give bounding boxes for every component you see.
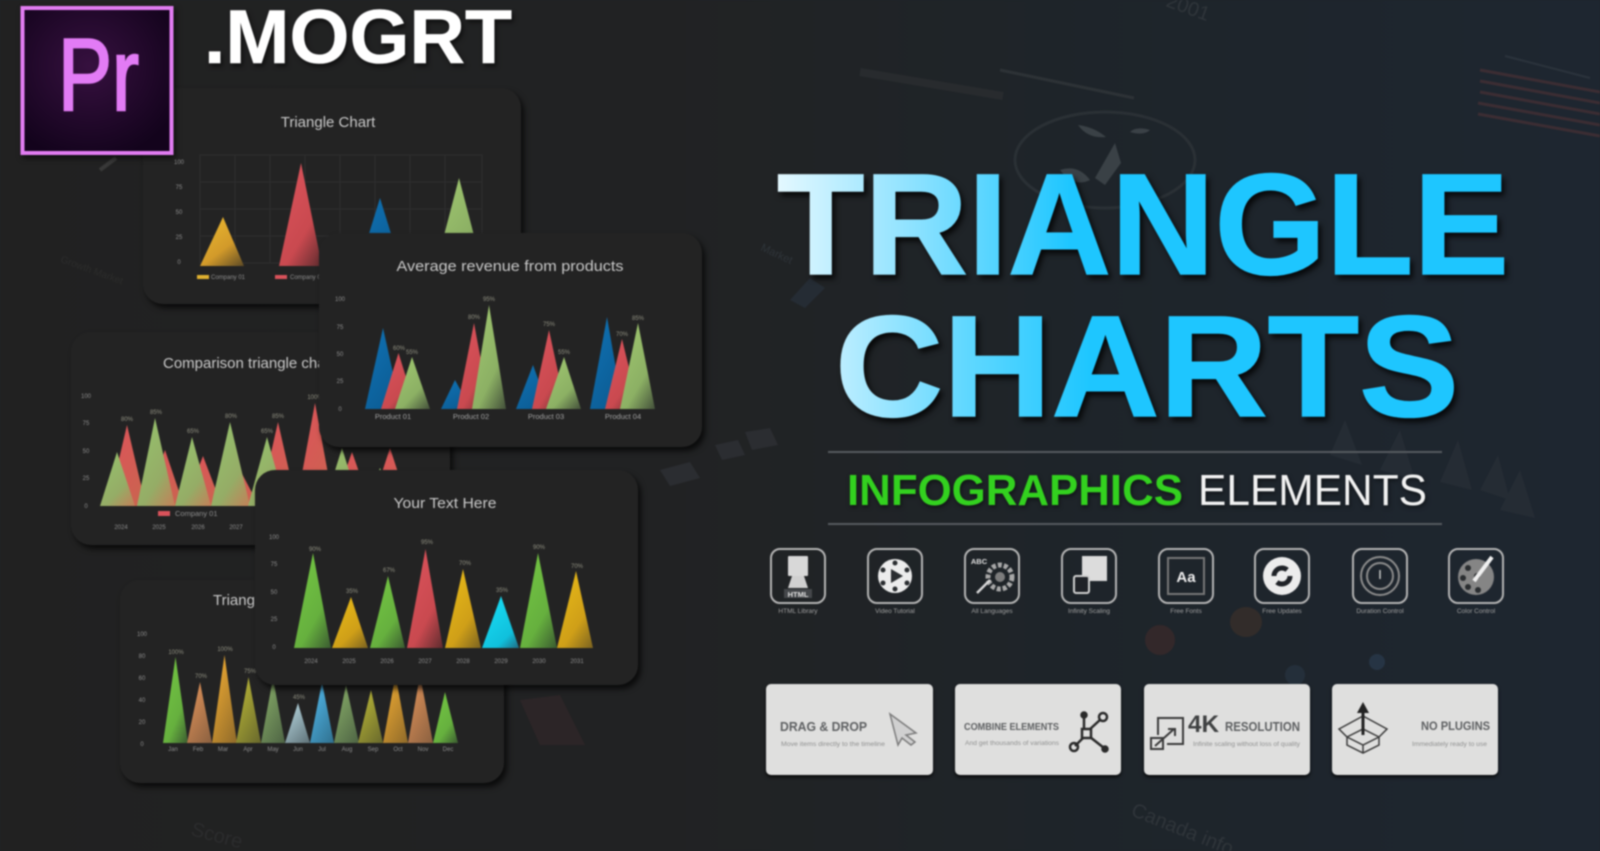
y axis labels: 50 — [337, 352, 344, 358]
value labels: 70% — [616, 332, 629, 338]
value labels: 67% — [383, 568, 396, 574]
product labels: Product 03 — [528, 412, 564, 421]
y axis labels: 25 — [337, 379, 344, 385]
feature: combine elements: COMBINE ELEMENTS — [964, 722, 1059, 733]
chart grid — [200, 155, 482, 263]
feature: combine elements — [955, 684, 1121, 775]
value labels: 80% — [121, 417, 134, 423]
card title: Average revenue from products — [396, 258, 624, 275]
value labels: 70% — [459, 561, 472, 567]
value labels — [168, 647, 306, 701]
card title: Your Text Here — [394, 495, 496, 512]
value labels: 100% — [217, 647, 233, 653]
icon: connected nodes — [1070, 712, 1108, 752]
feature: drag and drop: Move items directly to the timeline — [781, 742, 886, 748]
value labels — [309, 540, 584, 595]
x axis labels: 2024 — [114, 525, 128, 531]
month labels: Mar — [218, 747, 228, 753]
value labels: 75% — [543, 322, 556, 328]
value labels: 55% — [558, 350, 571, 356]
feature: combine elements: And get thousands of variations — [965, 741, 1059, 747]
y axis labels — [137, 632, 148, 748]
month labels: May — [267, 747, 279, 753]
title: TRIANGLE: TRIANGLE — [777, 144, 1509, 305]
icon: HTML library — [771, 549, 825, 615]
y axis labels: 60 — [139, 676, 146, 682]
card title: Triangle Chart — [281, 114, 376, 131]
y axis labels — [269, 535, 280, 651]
y axis labels: 25 — [83, 476, 90, 482]
icon: infinity scaling: Infinity Scaling — [1068, 608, 1110, 615]
month labels: Aug — [342, 747, 352, 753]
value labels: 70% — [195, 674, 208, 680]
value labels: 80% — [225, 414, 238, 420]
feature: drag and drop — [766, 684, 933, 775]
faint background charts: Growth Market — [59, 254, 125, 287]
y axis labels: 100 — [137, 632, 148, 638]
value labels: 70% — [571, 564, 584, 570]
y axis labels: 0 — [140, 742, 144, 748]
triangles — [294, 549, 593, 648]
icon: HTML library: HTML Library — [778, 608, 818, 615]
icon: all languages — [965, 549, 1019, 615]
month labels: Jul — [318, 747, 326, 753]
month labels: Sep — [368, 747, 379, 753]
value labels: 85% — [632, 316, 645, 322]
icon: video tutorial — [868, 549, 922, 615]
x axis labels: 2025 — [342, 659, 356, 665]
y axis labels — [174, 160, 185, 266]
subtitle: infographics elements: ELEMENTS — [1198, 466, 1427, 515]
icon: resize arrow — [1151, 718, 1183, 749]
icon: duration control: Duration Control — [1356, 608, 1404, 615]
value labels: 65% — [261, 429, 274, 435]
icon: cursor — [890, 714, 916, 745]
y axis labels — [335, 297, 346, 413]
value labels: 35% — [496, 588, 509, 594]
month labels: Jun — [293, 747, 303, 753]
month labels: Apr — [243, 747, 253, 753]
legend: Company 02 — [290, 275, 325, 281]
y axis labels: 75 — [337, 325, 344, 331]
icon: color control: Color Control — [1457, 608, 1496, 615]
value labels: 45% — [293, 695, 306, 701]
feature: 4K resolution — [1144, 684, 1310, 775]
icon: HTML library: HTML — [788, 590, 809, 599]
y axis labels: 100 — [269, 535, 280, 541]
x axis labels: 2031 — [570, 659, 584, 665]
month labels: Dec — [443, 747, 453, 753]
y axis labels: 40 — [139, 698, 146, 704]
icon: infinity scaling — [1062, 549, 1116, 615]
month labels: Jan — [168, 747, 178, 753]
monthly triangles — [163, 655, 458, 743]
y axis labels: 80 — [139, 654, 146, 660]
y axis labels: 75 — [271, 562, 278, 568]
legend — [197, 275, 325, 281]
icon: Premiere Pro logo — [22, 8, 172, 153]
y axis labels: 25 — [271, 617, 278, 623]
feature: drag and drop: DRAG & DROP — [780, 719, 867, 734]
y axis labels: 100 — [335, 297, 346, 303]
month labels: Oct — [393, 747, 403, 753]
icon: all languages: All Languages — [971, 608, 1013, 615]
y axis labels: 50 — [271, 590, 278, 596]
red triangles — [108, 403, 409, 506]
month labels — [168, 747, 453, 753]
x axis labels: 2025 — [152, 525, 166, 531]
triangles — [200, 163, 482, 266]
icon: video tutorial: Video Tutorial — [875, 608, 915, 615]
icon: free fonts: Free Fonts — [1170, 608, 1202, 615]
value labels: 85% — [272, 414, 285, 420]
x axis labels: 2026 — [191, 525, 205, 531]
y axis labels: 0 — [177, 260, 181, 266]
product labels: Product 04 — [605, 412, 641, 421]
value labels: 80% — [468, 315, 481, 321]
value labels: 90% — [533, 545, 546, 551]
panel: Triangle chart by months card — [120, 580, 504, 783]
icon row — [771, 549, 1503, 615]
x axis labels: 2027 — [229, 525, 243, 531]
legend: Company 01 — [175, 509, 218, 518]
y axis labels: 50 — [176, 210, 183, 216]
product labels — [375, 412, 641, 421]
x axis labels: 2026 — [380, 659, 394, 665]
product labels: Product 02 — [453, 412, 489, 421]
value labels: 90% — [309, 547, 322, 553]
value labels: 95% — [421, 540, 434, 546]
legend: Company 01 — [211, 275, 246, 281]
y axis labels: 25 — [176, 235, 183, 241]
group: product 02 — [441, 305, 506, 409]
product labels: Product 01 — [375, 412, 411, 421]
icon: duration control — [1353, 549, 1407, 615]
feature: 4K resolution: Infinite scaling without loss of quality — [1193, 742, 1300, 748]
panel: Comparison triangle chart card — [71, 332, 450, 545]
x axis labels: 2027 — [418, 659, 432, 665]
value labels: 100% — [307, 395, 323, 401]
y axis labels: 75 — [176, 185, 183, 191]
y axis labels: 0 — [338, 407, 342, 413]
icon: Premiere Pro logo: Pr — [58, 18, 139, 132]
x axis labels — [304, 659, 584, 665]
value labels: 65% — [187, 429, 200, 435]
value labels: 60% — [393, 346, 406, 352]
subtitle: infographics elements — [847, 466, 1427, 515]
group: product 03 — [516, 330, 581, 409]
x axis labels: 2029 — [494, 659, 508, 665]
icon: free updates — [1255, 549, 1309, 615]
x axis labels — [114, 525, 243, 531]
y axis labels: 50 — [83, 449, 90, 455]
value labels: 55% — [406, 350, 419, 356]
icon: free fonts — [1159, 549, 1213, 615]
value labels: 35% — [346, 589, 359, 595]
y axis labels: 100 — [81, 394, 92, 400]
group: product 04 — [590, 317, 655, 409]
panel: Average revenue card — [319, 233, 702, 447]
subtitle: infographics elements: INFOGRAPHICS — [847, 466, 1183, 515]
y axis labels: 0 — [272, 645, 276, 651]
feature: no plugins: NO PLUGINS — [1421, 719, 1490, 733]
feature: 4K resolution: RESOLUTION — [1225, 719, 1300, 734]
y axis labels — [81, 394, 92, 510]
icon: all languages: ABC — [971, 557, 988, 566]
value labels: 75% — [244, 669, 257, 675]
x axis labels: 2030 — [532, 659, 546, 665]
y axis labels: 20 — [139, 720, 146, 726]
month labels: Nov — [418, 747, 428, 753]
title: CHARTS: CHARTS — [835, 286, 1459, 447]
green triangles — [100, 418, 398, 506]
feature: no plugins — [1332, 684, 1498, 775]
card title: Triangle chart by month — [213, 592, 370, 609]
month labels: Feb — [193, 747, 204, 753]
card title: Comparison triangle chart — [163, 355, 336, 372]
icon: open box with arrow — [1339, 702, 1387, 753]
icon: free updates: Free Updates — [1262, 608, 1302, 615]
feature: no plugins: Immediately ready to use — [1412, 742, 1488, 748]
faint background charts: Market — [759, 242, 794, 267]
value labels: 100% — [168, 650, 184, 656]
y axis labels: 100 — [174, 160, 185, 166]
panel: Triangle Chart card — [143, 88, 521, 304]
value labels: 95% — [483, 297, 496, 303]
group: product 01 — [365, 328, 430, 409]
x axis labels: 2024 — [304, 659, 318, 665]
value labels — [393, 297, 645, 356]
value labels: 85% — [150, 410, 163, 416]
panel: Your Text Here card — [255, 470, 638, 685]
icon: free fonts: Aa — [1176, 569, 1196, 586]
value labels — [121, 395, 323, 435]
y axis labels: 75 — [83, 421, 90, 427]
y axis labels: 0 — [84, 504, 88, 510]
x axis labels: 2028 — [456, 659, 470, 665]
icon: color control — [1449, 549, 1503, 615]
feature: 4K resolution: 4K — [1188, 711, 1220, 738]
